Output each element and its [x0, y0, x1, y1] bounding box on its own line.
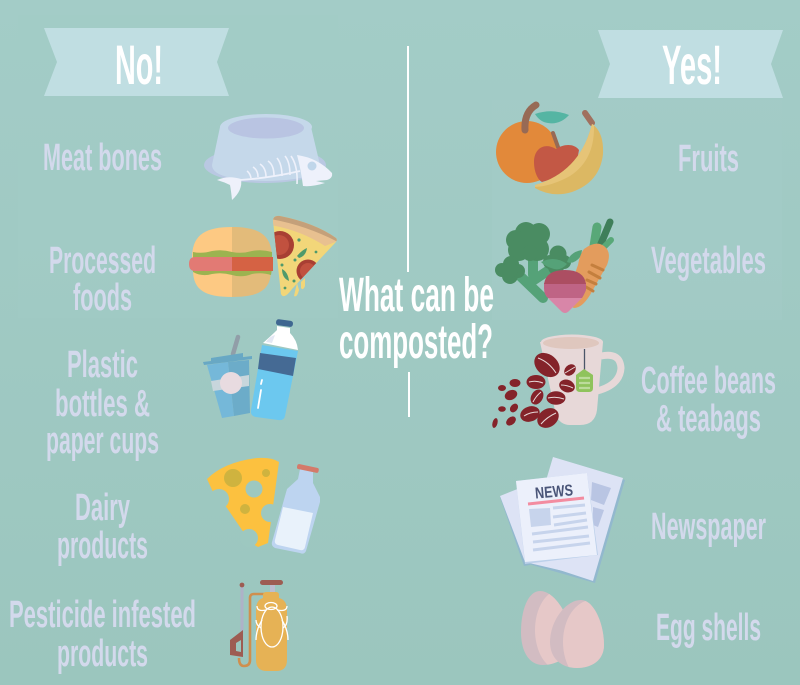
label: Dairy products: products	[57, 525, 148, 567]
label: Processed foods: Processed	[49, 240, 156, 282]
icon: cheese	[207, 458, 279, 547]
banner: Yes!: Yes!	[662, 33, 722, 96]
central divider and question	[339, 46, 494, 417]
icon: pizza slice	[273, 216, 337, 296]
label: Dairy products: Dairy	[75, 487, 130, 529]
banner: No!	[44, 28, 229, 96]
label: Pesticide infested products: products	[57, 633, 148, 675]
front page: NEWS	[534, 482, 574, 503]
central divider and question: composted?	[339, 316, 493, 369]
label: Processed foods	[49, 240, 156, 319]
label: Processed foods: foods	[73, 277, 132, 319]
icon: fish bones and bowl	[204, 114, 332, 200]
banner: Yes!	[598, 30, 783, 98]
label: Plastic bottles and paper cups: Plastic	[67, 344, 138, 386]
icon: fruits	[496, 105, 603, 194]
icon: pesticide sprayer	[230, 580, 288, 671]
icon: plastic bottle	[251, 319, 298, 420]
icon: newspapers	[500, 457, 625, 583]
label: Pesticide infested products	[9, 594, 196, 675]
icon: eggs	[521, 591, 604, 668]
label: Dairy products	[57, 487, 148, 567]
label: Plastic bottles and paper cups: paper cups	[46, 420, 159, 462]
label: Coffee beans and teabags	[641, 360, 776, 440]
label: Plastic bottles and paper cups: bottles &	[55, 383, 150, 425]
icon: paper cup	[203, 337, 252, 418]
icon: burger	[189, 227, 273, 297]
icon: coffee beans	[491, 348, 578, 432]
icon: milk bottle	[272, 464, 320, 554]
icon: vegetables	[495, 222, 611, 313]
central divider and question: What can be	[339, 269, 494, 322]
banner: No!: No!	[115, 33, 163, 96]
label: Plastic bottles and paper cups	[46, 344, 159, 462]
label: Pesticide infested products: Pesticide infested	[9, 594, 196, 636]
label: Meat bones: Meat bones	[43, 137, 162, 179]
icon: mug with tea bag	[540, 334, 621, 425]
label: Fruits: Fruits	[678, 138, 739, 180]
